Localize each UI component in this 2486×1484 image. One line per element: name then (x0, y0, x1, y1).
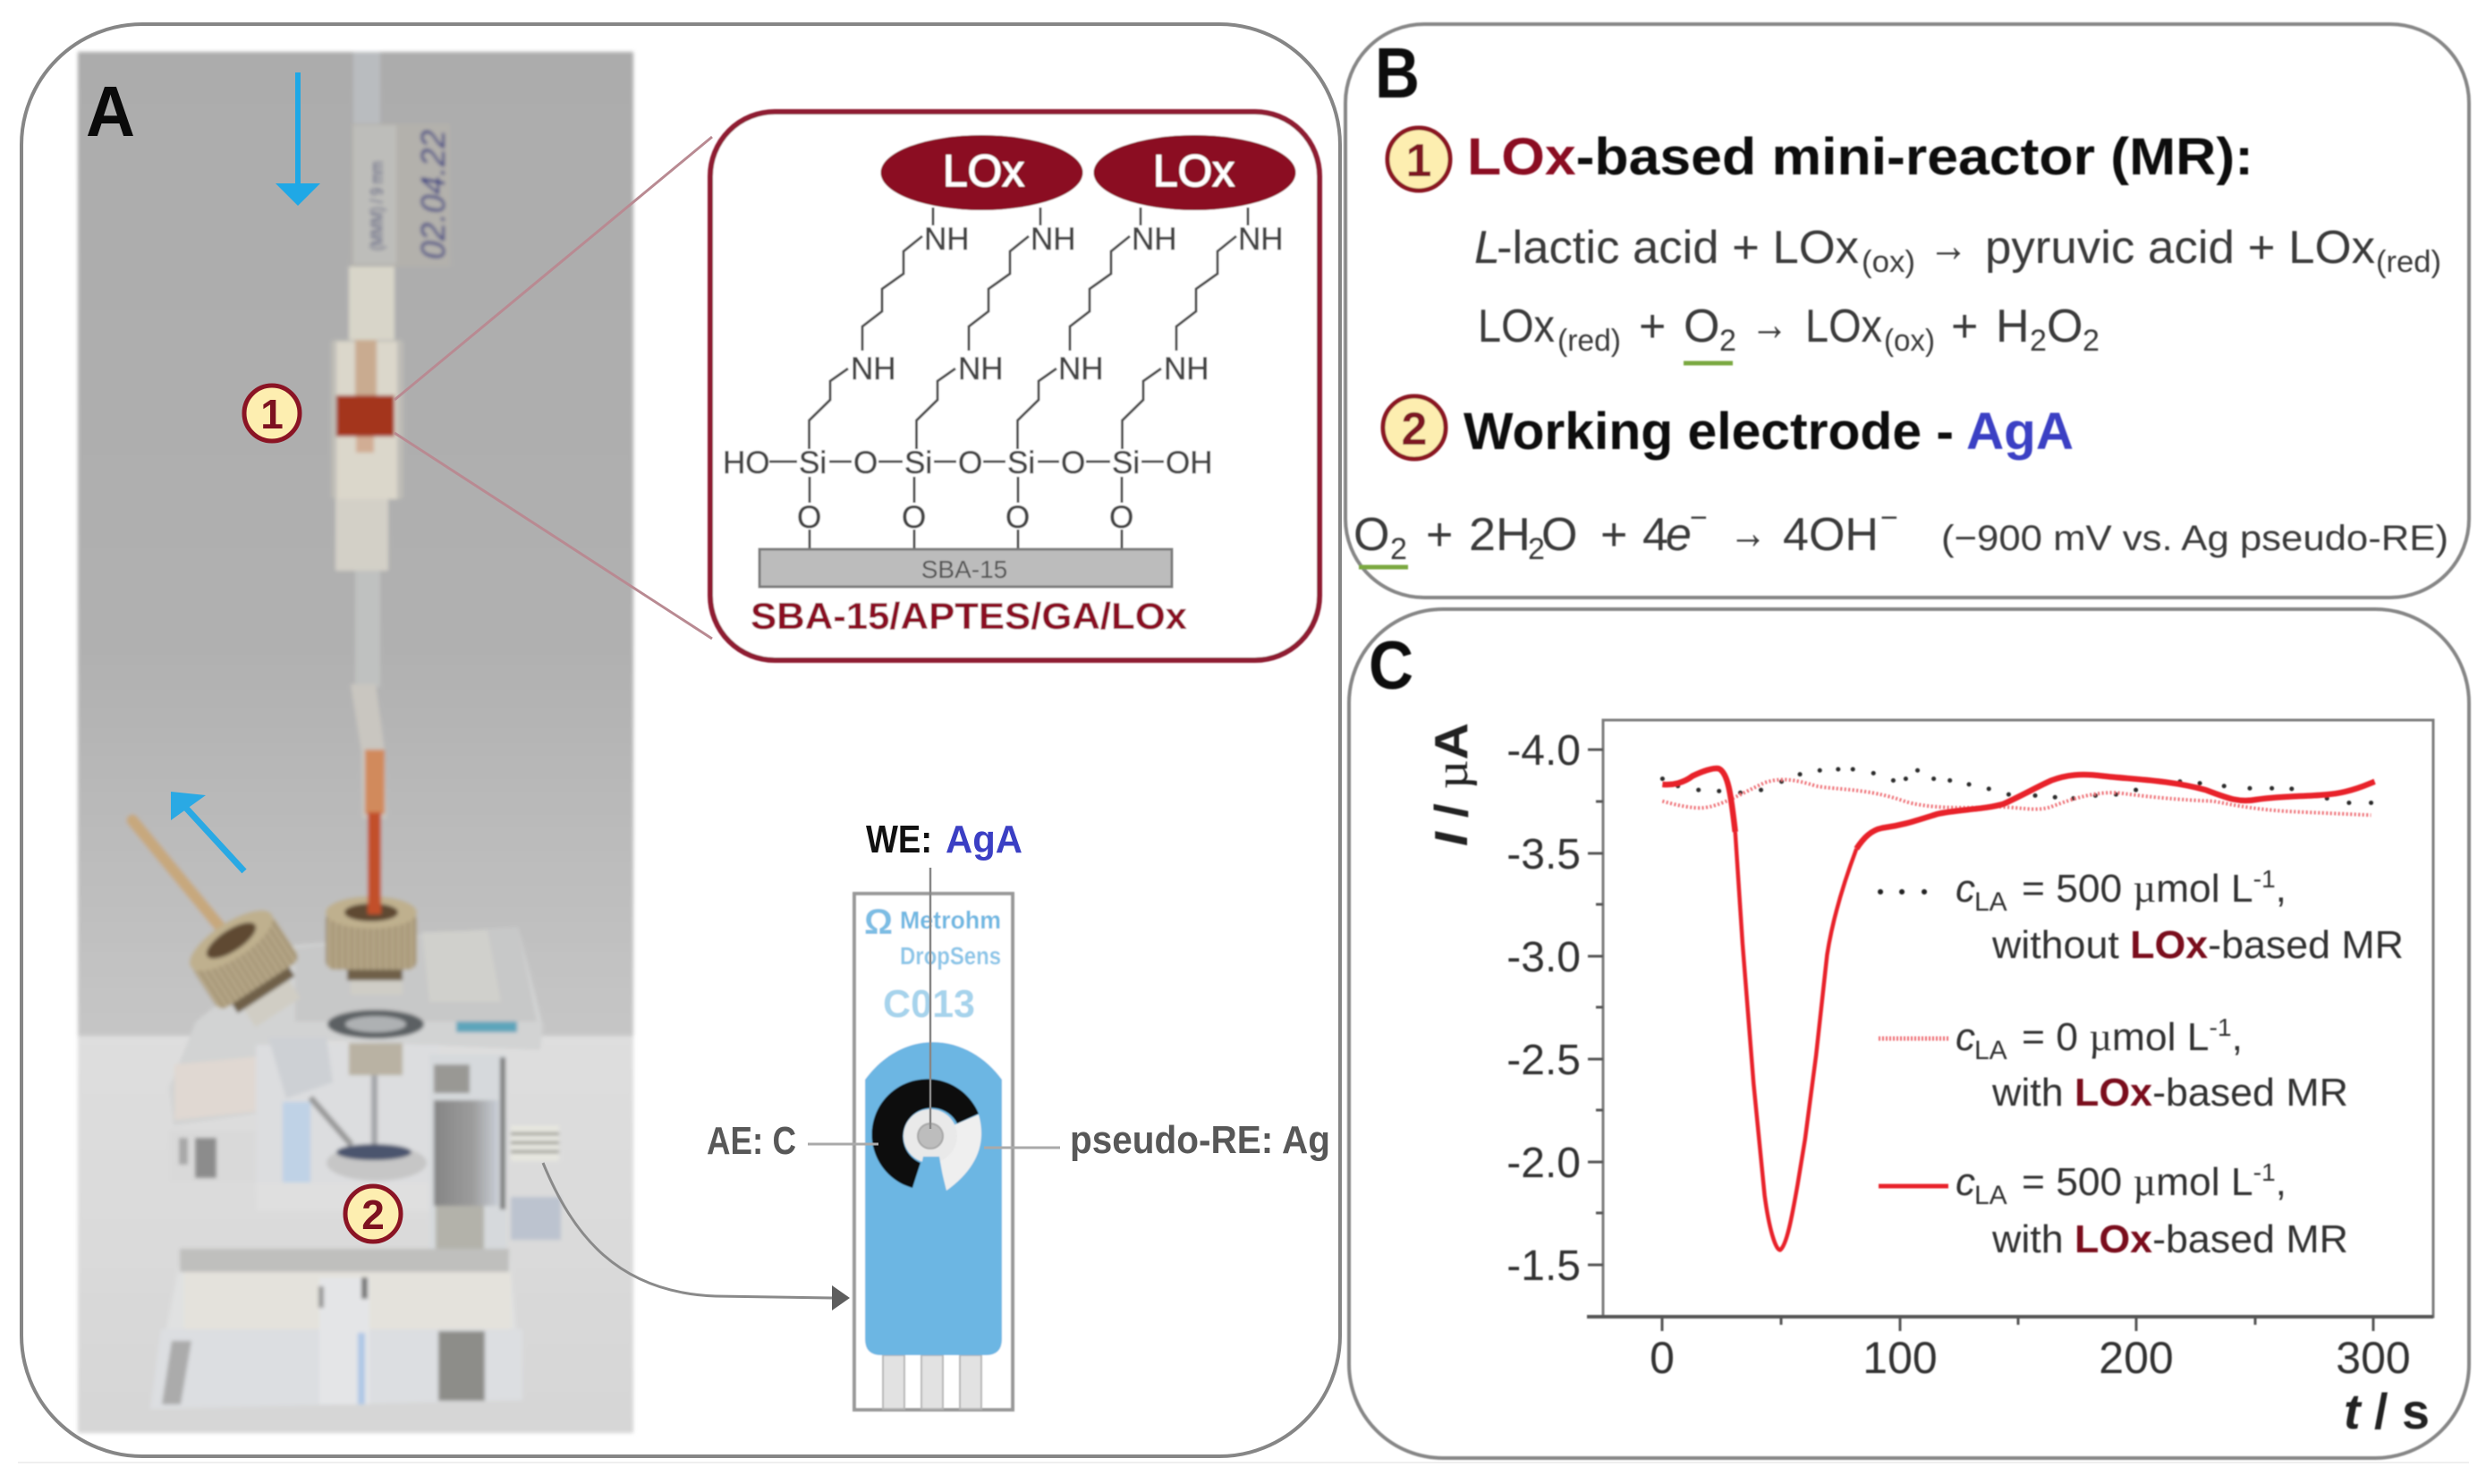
NH labels: NH (1031, 222, 1076, 257)
legend: black dots: without LOx-based MR (1991, 923, 2404, 967)
brand text (864, 903, 1001, 1026)
NH labels: NH (958, 352, 1004, 386)
brand text: Ω (864, 903, 893, 942)
equation 2: (red) (1557, 324, 1621, 358)
icon: flow direction arrow in (276, 72, 320, 206)
heading: working electrode: AgA (1966, 403, 2074, 461)
enzyme LOx 1 (880, 135, 1082, 210)
equation 3: e (1666, 509, 1692, 561)
equation 3: − (1690, 501, 1708, 535)
legend: pink dotted: with LOx-based MR (1991, 1071, 2348, 1115)
y-axis labels: -2.0 (1506, 1140, 1581, 1187)
y-axis title: I / µA (1426, 723, 1478, 846)
equation 2: LOx (1478, 301, 1555, 352)
legend: pink dotted: -1 (2210, 1013, 2232, 1041)
equation 2: 2 (2083, 324, 2100, 358)
equation 3: (−900 mV vs. Ag pseudo-RE) (1941, 519, 2448, 558)
top acrylic plate (169, 927, 543, 1125)
equation 3: 2H (1469, 509, 1531, 561)
NH labels: NH (1058, 352, 1104, 386)
legend: pink dotted (1879, 1013, 2348, 1115)
siloxane backbone labels: O (958, 445, 982, 480)
siloxane backbone labels: O (902, 500, 926, 535)
legend: solid red: with LOx-based MR (1991, 1217, 2348, 1261)
label: AE: AE: C (707, 1119, 796, 1163)
NH labels: NH (1238, 222, 1284, 257)
NH labels (851, 222, 1284, 386)
electrode contacts (883, 1355, 981, 1409)
badge 1 on photo (244, 386, 300, 441)
y-axis labels: -2.5 (1506, 1037, 1581, 1084)
badge 2 (1383, 396, 1446, 459)
equation 1: -lactic acid + LOx (1497, 222, 1859, 274)
equation 1: (red) (2376, 245, 2441, 279)
enzyme LOx 1: LOx (943, 146, 1024, 196)
equation 1: L (1474, 222, 1500, 274)
brand text: C013 (883, 982, 975, 1026)
siloxane backbone labels: O (1061, 445, 1085, 480)
equation 2 (1478, 299, 2100, 363)
equation 2: H (1996, 301, 2030, 352)
legend: black dots: = 500 µmol L (2022, 867, 2253, 911)
equation 3: O (1541, 509, 1577, 561)
equation 1: pyruvic acid + LOx (1985, 222, 2375, 274)
panel B: reactions (1345, 24, 2469, 598)
y-axis labels: -4.0 (1506, 727, 1581, 775)
heading: working electrode: Working electrode - (1464, 403, 1954, 461)
legend: pink dotted: , (2232, 1015, 2243, 1059)
siloxane backbone labels (723, 445, 1213, 535)
zoom lines to inset (395, 137, 712, 639)
badge 1 on photo: 1 (260, 391, 284, 437)
badge 2: 2 (1402, 403, 1427, 455)
NH labels: NH (1164, 352, 1209, 386)
equation 3: 2 (1528, 532, 1545, 566)
legend: black dots: LA (1974, 887, 2007, 917)
equation 2: + (1639, 301, 1666, 352)
siloxane backbone labels: Si (1007, 445, 1035, 480)
equation 2: → (1751, 299, 1788, 351)
badge 1 (1387, 128, 1450, 191)
siloxane backbone labels: HO (723, 445, 769, 480)
brand text: Metrohm (900, 906, 1001, 934)
equation 3: 2 (1390, 532, 1407, 566)
NH labels: NH (924, 222, 970, 257)
label: pseudo-RE: pseudo-RE: Ag (1070, 1118, 1330, 1162)
NH labels: NH (851, 352, 896, 386)
y-axis labels: -3.5 (1506, 831, 1581, 878)
equation 2: + (1951, 301, 1978, 352)
x-axis labels: 100 (1862, 1333, 1938, 1383)
equation 3: 4 (1642, 509, 1668, 561)
equation 3 (1353, 501, 2448, 567)
reference electrode arc (938, 1115, 981, 1191)
electrode contact pins (511, 1125, 559, 1161)
label: WE: AgA (946, 818, 1022, 861)
plot frame and axes (1587, 720, 2433, 1331)
label: WE: WE: (866, 818, 932, 861)
linker chains (769, 208, 1248, 549)
working electrode disc (904, 1109, 957, 1191)
heading: B: B (1375, 33, 1420, 113)
equation 1: → (1929, 220, 1968, 272)
blue insulation (865, 1042, 1002, 1355)
y-axis labels: -3.0 (1506, 934, 1581, 981)
equation 3: O (1353, 509, 1389, 561)
photo: flow cell with mini-reactor: 02.04.22 (415, 130, 453, 259)
y-axis labels (1506, 727, 1581, 1290)
x-axis labels: 0 (1650, 1333, 1675, 1383)
enzyme LOx 2: LOx (1153, 146, 1235, 196)
legend: solid red: -1 (2253, 1158, 2276, 1186)
siloxane backbone labels: Si (799, 445, 827, 480)
panel A: experimental setup (21, 24, 1340, 1456)
x-axis labels: 300 (2336, 1333, 2411, 1383)
equation 2: O (1684, 301, 1719, 352)
siloxane backbone labels: O (797, 500, 821, 535)
outlet tube (132, 820, 228, 937)
label: WE (866, 818, 1022, 1129)
NH labels: NH (1132, 222, 1177, 257)
badge 1: 1 (1406, 135, 1431, 187)
series: 500 µmol/L without MR (black dots) (1662, 769, 2371, 803)
SBA-15 support bar: SBA-15 (921, 555, 1007, 583)
lower block (150, 1249, 522, 1409)
x-axis title: t / s (2344, 1383, 2430, 1439)
equation 3: 4OH (1783, 509, 1879, 561)
heading: C: C (1369, 628, 1413, 704)
legend: pink dotted: = 0 µmol L (2022, 1015, 2209, 1059)
steel pillar (429, 1055, 506, 1253)
equation 3: + (1426, 509, 1453, 561)
siloxane backbone labels: OH (1166, 445, 1213, 480)
legend: pink dotted: c (1956, 1015, 1975, 1059)
equation 3: → (1729, 507, 1767, 559)
legend: black dots: -1 (2253, 865, 2276, 893)
legend: solid red: = 500 µmol L (2022, 1160, 2253, 1204)
legend: solid red: , (2276, 1160, 2287, 1204)
enzyme LOx 2 (1093, 135, 1295, 210)
SBA-15 support bar (759, 549, 1172, 587)
siloxane backbone labels: O (1109, 500, 1133, 535)
inset caption: SBA-15/APTES/GA/LOx (751, 595, 1188, 637)
equation 2: LOx (1805, 301, 1882, 352)
equation 2: (ox) (1884, 324, 1935, 358)
legend: solid red (1879, 1158, 2348, 1261)
heading: mini-reactor: LOx-based mini-reactor (MR): (1467, 128, 2253, 186)
equation 1: (ox) (1862, 245, 1915, 279)
x-axis labels: 200 (2099, 1333, 2174, 1383)
equation 2: O (2047, 301, 2083, 352)
equation 2: 2 (1719, 324, 1736, 358)
brand text: DropSens (900, 942, 1001, 970)
equation 1 (1474, 220, 2441, 279)
legend: pink dotted: LA (1974, 1036, 2007, 1065)
straight fitting (326, 895, 417, 995)
photo: flow cell with mini-reactor (78, 52, 633, 1433)
counter electrode arc (872, 1079, 979, 1188)
equation 3: + (1600, 509, 1627, 561)
siloxane backbone labels: Si (1112, 445, 1140, 480)
screen-printed electrode (854, 894, 1013, 1410)
legend: black dots: c (1956, 867, 1975, 911)
panel C: amperometric response chart (1349, 609, 2469, 1458)
siloxane backbone labels: Si (904, 445, 932, 480)
badge 2 on photo (345, 1186, 401, 1242)
legend: solid red: LA (1974, 1181, 2007, 1210)
photo: flow cell with mini-reactor: (MMM) / 9 mm (368, 161, 387, 250)
equation 2: 2 (2030, 324, 2047, 358)
equation 3: − (1880, 501, 1898, 535)
x-axis labels (1650, 1333, 2411, 1383)
legend: solid red: c (1956, 1160, 1975, 1204)
legend: black dots: , (2276, 867, 2287, 911)
heading: A: A (86, 72, 135, 151)
y-axis labels: -1.5 (1506, 1242, 1581, 1290)
series: 0 µmol/L with MR (pink dotted) (1662, 780, 2371, 815)
connector arrow: pins to electrode (543, 1163, 850, 1310)
badge 2 on photo: 2 (361, 1191, 385, 1238)
siloxane backbone labels: O (853, 445, 878, 480)
legend: black dots (1880, 865, 2404, 967)
icon: flow direction arrow out (171, 792, 244, 871)
series: 500 µmol/L with MR (solid red) (1662, 768, 2375, 1251)
inset: SBA-15/APTES/GA/LOx surface chemistry (710, 112, 1319, 660)
siloxane backbone labels: O (1005, 500, 1030, 535)
tilted fitting (181, 899, 318, 1039)
